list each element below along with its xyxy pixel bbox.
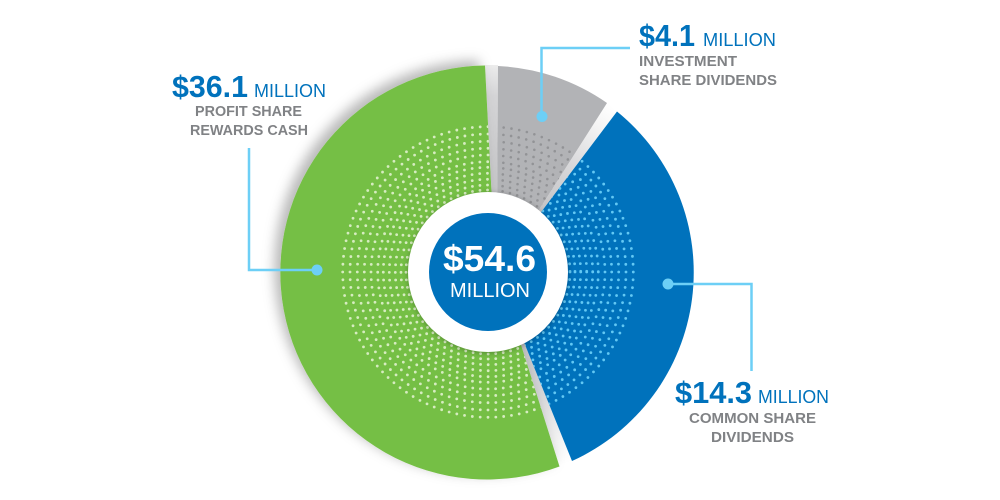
leader: investment share <box>536 48 630 122</box>
label: common share: $14.3 <box>675 375 752 410</box>
panel: investment share segment <box>497 66 607 210</box>
shaded gaps between segments <box>485 65 617 466</box>
label: investment share: SHARE DIVIDENDS <box>639 73 777 89</box>
leader: profit share <box>249 148 322 276</box>
label: profit share: REWARDS CASH <box>190 123 308 139</box>
label: investment share: MILLION <box>703 30 776 50</box>
label: investment share <box>639 18 777 89</box>
label: profit share: $36.1 <box>172 69 248 104</box>
center total: $54.6 <box>443 238 536 279</box>
leader: common share <box>662 278 752 371</box>
center total <box>429 213 547 331</box>
center total: MILLION <box>450 280 530 302</box>
label: common share: MILLION <box>758 387 829 407</box>
label: investment share: INVESTMENT <box>639 54 737 70</box>
label: profit share <box>172 69 326 139</box>
label: common share: COMMON SHARE <box>689 411 816 427</box>
label: common share: DIVIDENDS <box>711 430 794 446</box>
label: investment share: $4.1 <box>639 18 695 53</box>
panel: common share segment <box>524 112 694 461</box>
panel: profit share segment <box>268 54 560 482</box>
label: common share <box>675 375 829 446</box>
label: profit share: PROFIT SHARE <box>195 104 302 120</box>
infographic canvas <box>172 24 828 482</box>
label: profit share: MILLION <box>254 81 326 101</box>
white center ring <box>408 192 568 352</box>
